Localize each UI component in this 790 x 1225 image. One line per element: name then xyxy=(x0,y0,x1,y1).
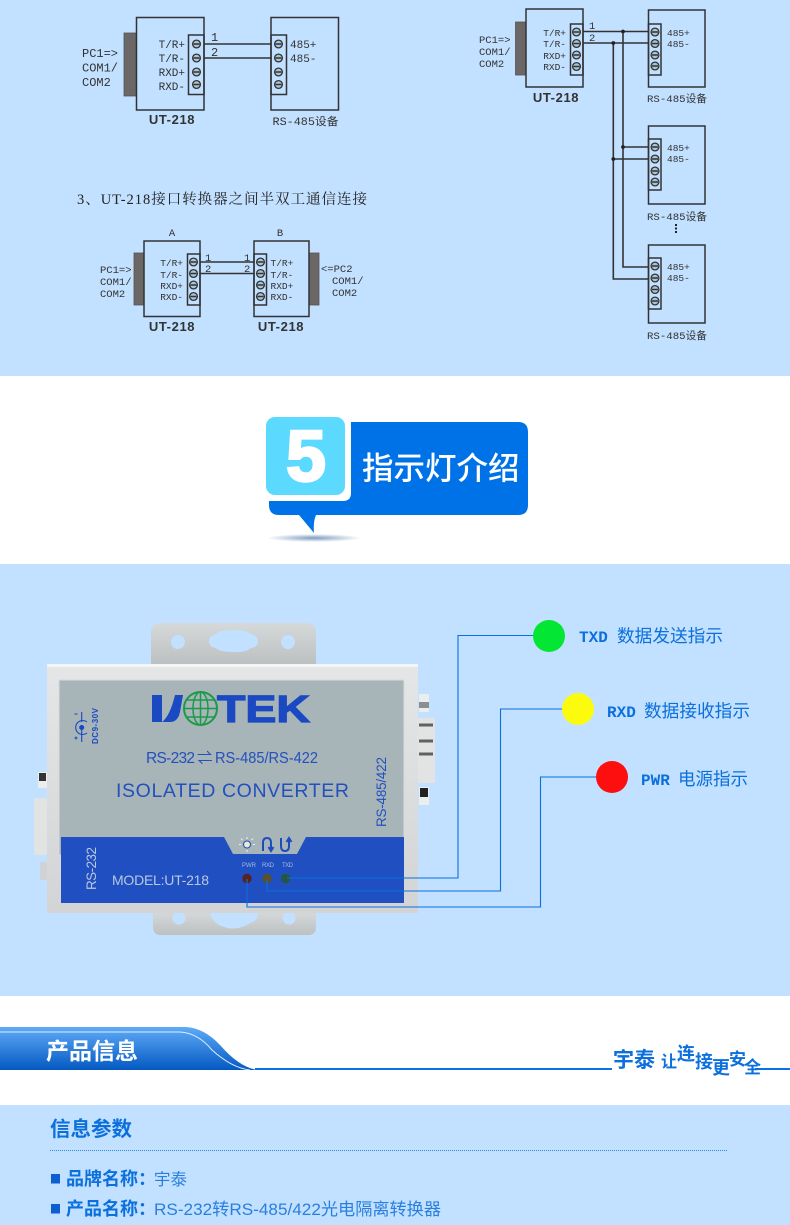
diagram: UT-218 to multiple RS-485 devices: 485- xyxy=(667,39,690,50)
power jack mark xyxy=(74,712,87,742)
RS-232 to RS-485 caption: RS-485/RS-422 xyxy=(215,750,318,767)
diagram: UT-218 to multiple RS-485 devices: 1 xyxy=(589,21,595,33)
RS-232 to RS-485 caption: ⇌ xyxy=(197,749,213,767)
diagram: UT-218 to multiple RS-485 devices: 485+ xyxy=(667,262,690,273)
section banner: product info xyxy=(0,1027,790,1070)
diagram: UT-218 to multiple RS-485 devices: COM1/ xyxy=(479,47,511,59)
product photo: UT-218 converter: DC9-30V xyxy=(91,707,100,744)
product photo: UT-218 converter: RS-485/422 xyxy=(374,757,389,827)
diagram: UT-218 to multiple RS-485 devices: 485+ xyxy=(667,28,690,39)
mounting tabs xyxy=(151,623,316,935)
diagram: UT-218 to single RS-485 device: COM2 xyxy=(82,76,111,90)
brand row: 宇泰 xyxy=(154,1170,188,1189)
diagram: UT-218 to multiple RS-485 devices: RXD- xyxy=(543,62,566,73)
slogan: 安 xyxy=(729,1050,746,1069)
diagram: two UT-218 half-duplex link: UT-218 xyxy=(258,319,304,334)
legend: TXD: 数据发送指示 xyxy=(617,623,723,648)
diagram: two UT-218 half-duplex link: RXD+ xyxy=(270,281,294,292)
heading: 信息参数 xyxy=(50,1117,132,1141)
diagram: two UT-218 half-duplex link: UT-218 xyxy=(149,319,195,334)
legend: PWR xyxy=(596,761,748,793)
section banner: product info: 产品信息 xyxy=(46,1038,138,1064)
product photo: UT-218 converter: RXD xyxy=(262,863,275,869)
diagram: UT-218 to multiple RS-485 devices: RS-485设备 xyxy=(647,210,708,224)
brand row: 品牌名称： xyxy=(66,1169,156,1189)
side connectors xyxy=(34,694,435,880)
diagram: UT-218 to single RS-485 device: COM1/ xyxy=(82,62,118,76)
slogan: 让 xyxy=(661,1053,677,1071)
slogan: 宇泰 xyxy=(613,1049,655,1072)
diagram: UT-218 to multiple RS-485 devices: RS-485设备 xyxy=(647,92,708,106)
diagram: UT-218 to multiple RS-485 devices: COM2 xyxy=(479,59,504,71)
diagram: two UT-218 half-duplex link: COM1/ xyxy=(100,277,132,289)
diagram: UT-218 to multiple RS-485 devices: 485- xyxy=(667,273,690,284)
legend: TXD xyxy=(533,620,723,652)
LED lamps xyxy=(242,874,290,883)
indicator icons xyxy=(239,837,292,852)
diagram: UT-218 to multiple RS-485 devices: RS-485设备 xyxy=(647,329,708,343)
diagram: two UT-218 half-duplex link: PC1=> xyxy=(100,265,132,277)
RS-232 to RS-485 caption xyxy=(146,749,318,767)
product photo: UT-218 converter xyxy=(34,623,435,935)
diagram: UT-218 to multiple RS-485 devices: 2 xyxy=(589,33,595,45)
diagram: two UT-218 half-duplex link: <=PC2 xyxy=(321,264,353,276)
diagram: UT-218 to single RS-485 device: 2 xyxy=(211,46,218,60)
slogan: 更 xyxy=(712,1058,730,1078)
diagram: UT-218 to single RS-485 device: PC1=> xyxy=(82,47,118,61)
product photo: UT-218 converter: PWR xyxy=(242,863,257,869)
slogan xyxy=(613,1044,761,1078)
diagram: two UT-218 half-duplex link: T/R+ xyxy=(270,258,294,269)
product name row: 产品名称： xyxy=(66,1199,156,1219)
diagram: two UT-218 half-duplex link: RXD- xyxy=(160,292,183,303)
legend: TXD: TXD xyxy=(579,629,608,647)
product photo: UT-218 converter: RS-232 xyxy=(84,847,99,890)
diagram: two UT-218 half-duplex link: T/R- xyxy=(160,270,183,281)
brand logo: TEK xyxy=(217,689,311,731)
diagram: UT-218 to single RS-485 device xyxy=(82,18,338,129)
diagram: UT-218 to single RS-485 device: UT-218 xyxy=(149,112,195,127)
diagram: UT-218 to single RS-485 device: 485- xyxy=(290,54,316,66)
diagram: UT-218 to single RS-485 device: T/R+ xyxy=(159,40,185,52)
diagram: two UT-218 half-duplex link: T/R- xyxy=(270,270,293,281)
diagram: two UT-218 half-duplex link: 1 xyxy=(205,253,211,265)
diagram: two UT-218 half-duplex link: RXD- xyxy=(270,292,293,303)
diagram: two UT-218 half-duplex link: COM2 xyxy=(332,288,357,300)
leader lines from LEDs to legend xyxy=(247,636,597,907)
product name row xyxy=(51,1199,441,1219)
diagram: UT-218 to single RS-485 device: RXD+ xyxy=(159,68,185,80)
section heading: 5 indicator lights xyxy=(262,413,528,542)
panel: indicator lights background xyxy=(0,564,790,996)
brand row xyxy=(51,1169,188,1189)
RS-232 to RS-485 caption: RS-232 xyxy=(146,750,195,767)
diagram: two UT-218 half-duplex link: RXD+ xyxy=(160,281,183,292)
product photo: UT-218 converter: ISOLATED CONVERTER xyxy=(116,780,349,802)
heading: half-duplex connection caption: 3、UT-218接口转换器之间半双工通信连接 xyxy=(77,191,368,208)
slogan: 接 xyxy=(695,1052,713,1072)
diagram: UT-218 to single RS-485 device: 1 xyxy=(211,31,218,45)
section heading: 5 indicator lights: 5 xyxy=(286,417,326,497)
legend: PWR: 电源指示 xyxy=(678,766,748,791)
diagram: two UT-218 half-duplex link: T/R+ xyxy=(160,258,183,269)
legend: RXD: 数据接收指示 xyxy=(644,698,750,723)
diagram: UT-218 to multiple RS-485 devices: PC1=> xyxy=(479,35,511,47)
diagram: UT-218 to single RS-485 device: T/R- xyxy=(159,54,185,66)
panel: wiring diagrams background xyxy=(0,0,790,376)
slogan: 全 xyxy=(744,1057,761,1077)
diagram: two UT-218 half-duplex link: 1 xyxy=(244,253,250,265)
diagram: UT-218 to multiple RS-485 devices: UT-218 xyxy=(533,90,579,105)
diagram: UT-218 to single RS-485 device: RXD- xyxy=(159,82,185,94)
diagram: UT-218 to multiple RS-485 devices: 485- xyxy=(667,154,690,165)
legend: PWR: PWR xyxy=(641,772,670,790)
legend: RXD xyxy=(562,693,750,725)
diagram: UT-218 to single RS-485 device: RS-485设备 xyxy=(272,114,338,129)
section heading: 5 indicator lights: 指示灯介绍 xyxy=(362,450,520,486)
slogan: 连 xyxy=(677,1044,695,1064)
diagram: UT-218 to multiple RS-485 devices xyxy=(479,9,708,343)
product name row: RS-232转RS-485/422光电隔离转换器 xyxy=(154,1200,441,1219)
diagram: two UT-218 half-duplex link: 2 xyxy=(244,264,250,276)
product photo: UT-218 converter: MODEL:UT-218 xyxy=(112,872,209,888)
panel: info parameters xyxy=(0,1105,790,1225)
diagram: two UT-218 half-duplex link: COM1/ xyxy=(332,276,364,288)
diagram: UT-218 to single RS-485 device: 485+ xyxy=(290,40,316,52)
diagram: two UT-218 half-duplex link: B xyxy=(277,228,283,240)
diagram: UT-218 to multiple RS-485 devices: RXD+ xyxy=(543,51,566,62)
product photo: UT-218 converter: TXD xyxy=(282,863,294,869)
diagram: UT-218 to multiple RS-485 devices: 485+ xyxy=(667,143,690,154)
diagram: UT-218 to multiple RS-485 devices: T/R- xyxy=(543,39,566,50)
diagram: two UT-218 half-duplex link: A xyxy=(169,228,176,240)
diagram: UT-218 to multiple RS-485 devices: T/R+ xyxy=(543,28,566,39)
brand logo xyxy=(152,689,311,731)
diagram: two UT-218 half-duplex link xyxy=(100,228,364,334)
legend: RXD: RXD xyxy=(607,704,636,722)
diagram: two UT-218 half-duplex link: 2 xyxy=(205,264,211,276)
diagram: two UT-218 half-duplex link: COM2 xyxy=(100,289,125,301)
